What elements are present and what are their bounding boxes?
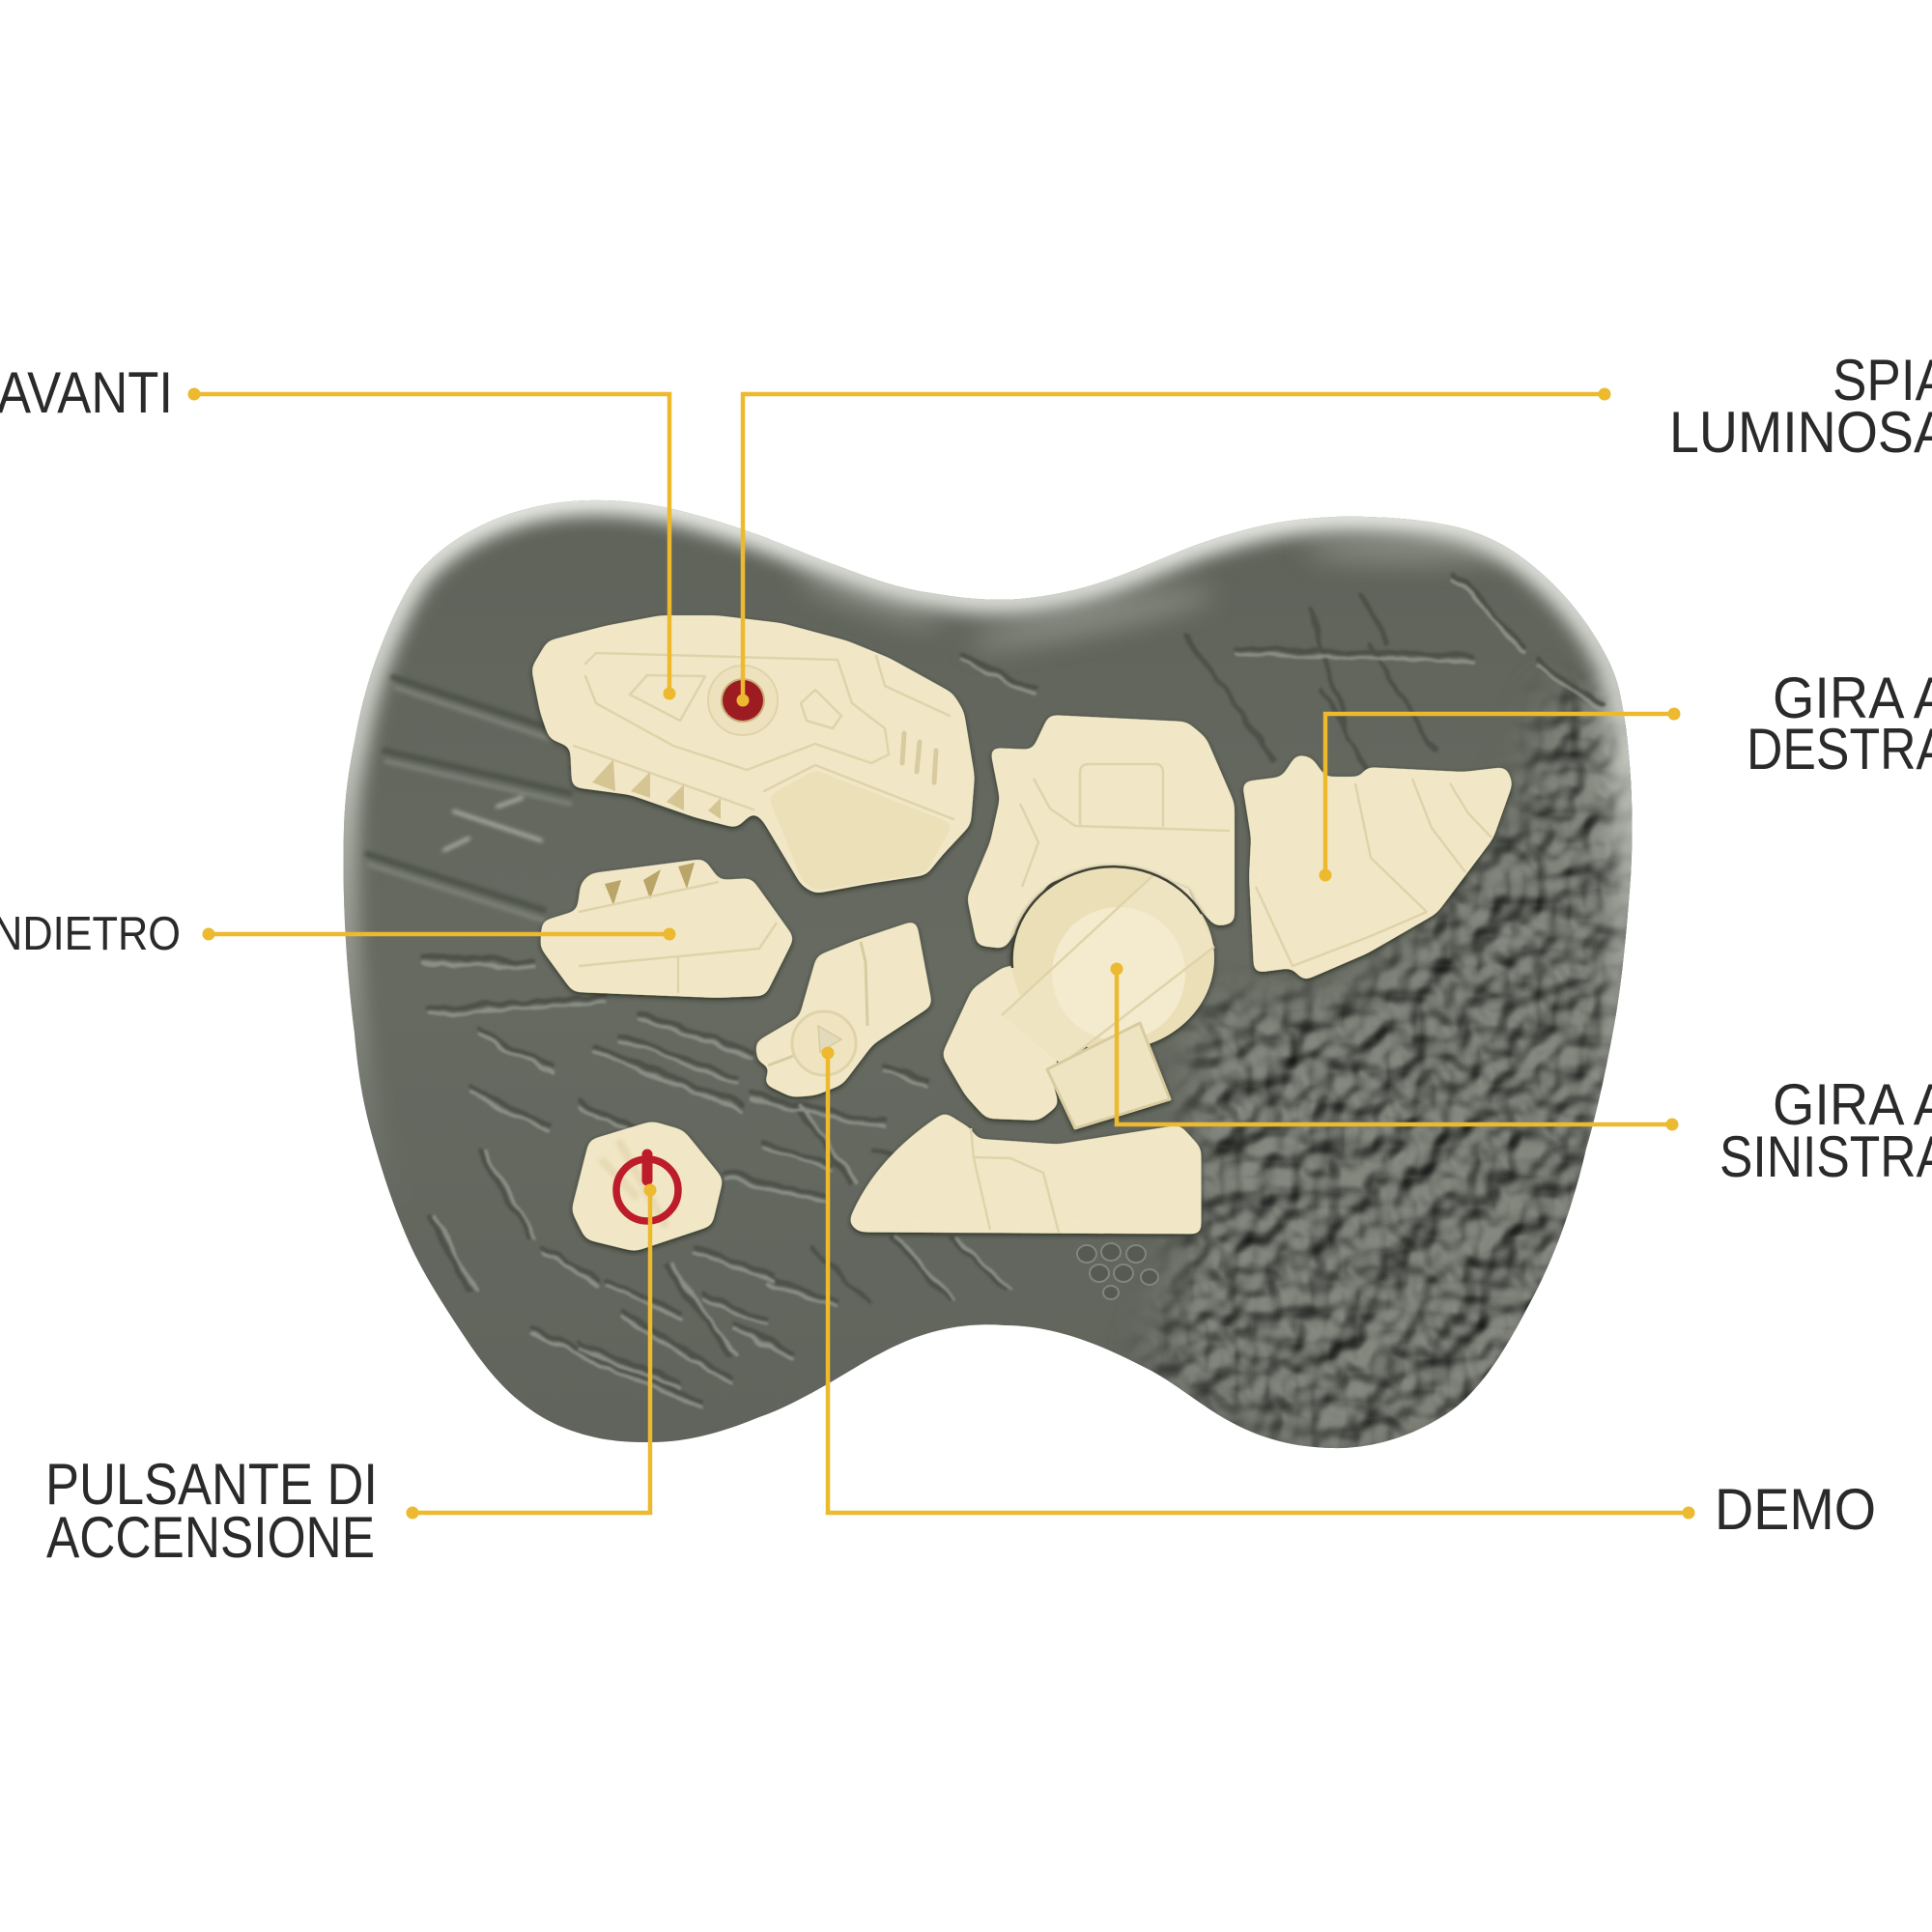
callout lines: [187, 388, 1694, 1519]
leader: gira a destra: [1320, 707, 1681, 881]
edge highlight: [344, 500, 1633, 1161]
leader: spia luminosa: [736, 388, 1611, 707]
label: gira a destra: [1747, 666, 1932, 781]
top glow patches: [793, 537, 1623, 898]
small pebble cluster: [1077, 1243, 1158, 1299]
panel: cream fossil buttons: [533, 617, 1511, 1249]
lower-right bumpy fossil texture: [1146, 688, 1633, 1449]
button piece: torso upper: [969, 717, 1233, 947]
cheek facet: [768, 770, 953, 891]
infographic canvas: [0, 359, 1932, 1557]
scratches: light ridges: [423, 578, 1603, 1409]
leader: gira a sinistra: [1111, 962, 1679, 1130]
leader: indietro: [203, 927, 676, 941]
icon: power symbol: [616, 1154, 678, 1221]
label: avanti: AVANTI: [0, 360, 173, 425]
label: gira a sinistra: [1719, 1072, 1932, 1189]
label: pulsante di accensione: ACCENSIONE: [46, 1505, 375, 1570]
button piece: arm (demo): [757, 923, 930, 1095]
left streaks: [367, 677, 570, 921]
button piece: hip (turn right tail): [1244, 756, 1511, 979]
panel: remote control stone board: [343, 500, 1681, 1497]
leader: avanti: [187, 388, 676, 699]
scratches: dark grooves: [423, 572, 1603, 1404]
button piece: belly: [850, 1114, 1200, 1233]
leader: demo: [821, 1047, 1694, 1519]
leader: pulsante di accensione: [406, 1184, 657, 1519]
button piece: skull (forward): [533, 617, 973, 892]
icon: play triangle: [818, 1026, 841, 1052]
label: pulsante di accensione: [45, 1452, 378, 1570]
label: pulsante di accensione: PULSANTE DI: [45, 1452, 378, 1517]
teeth shading: [592, 759, 721, 819]
light indicator eye: [708, 666, 778, 735]
label: demo: DEMO: [1715, 1477, 1876, 1542]
vents: [902, 733, 936, 782]
label: spia luminosa: [1669, 348, 1932, 465]
button piece: lower body and leg (turn left): [944, 867, 1214, 1128]
button piece: lower jaw (backward): [542, 861, 792, 996]
power button: [574, 1123, 721, 1249]
